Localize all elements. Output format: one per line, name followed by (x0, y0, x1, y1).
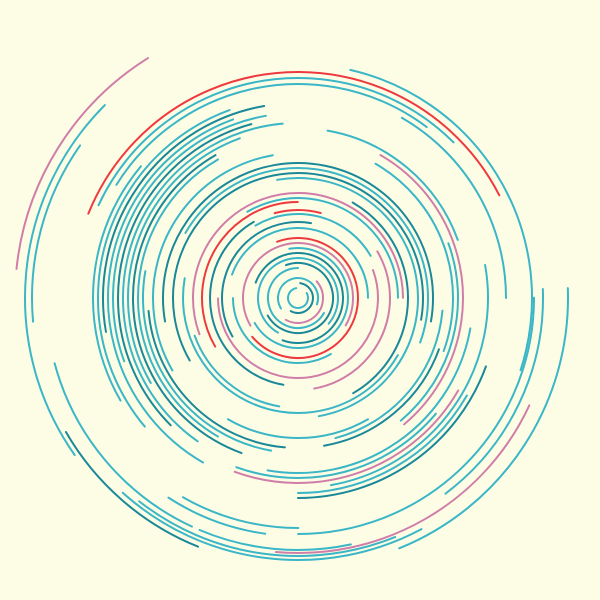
right and bottom band (32, 32, 564, 564)
inner arcs (194, 194, 402, 402)
middle ring (120, 120, 476, 476)
